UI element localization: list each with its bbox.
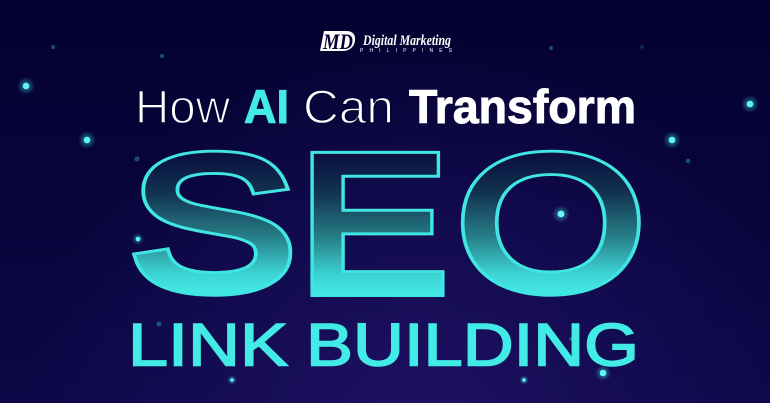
logo mark: MD <box>322 29 353 54</box>
title line <box>135 80 636 133</box>
word: AI: AI <box>244 80 289 133</box>
letter E: E <box>299 116 447 333</box>
word: Can: Can <box>303 80 394 133</box>
word: BUILDING: BUILDING <box>306 312 639 378</box>
letter E: E <box>299 116 447 333</box>
letter S: S <box>130 117 296 330</box>
letter O: O <box>457 117 645 330</box>
word: Transform: Transform <box>409 80 636 133</box>
letter O: O <box>457 117 645 330</box>
bright glowing dots <box>17 77 759 385</box>
logo subtitle: PHILIPPINES <box>360 48 453 54</box>
big SEO heading <box>130 116 645 333</box>
letter S: S <box>130 117 296 330</box>
dim dots <box>51 45 690 341</box>
logo <box>320 29 453 54</box>
word: LINK: LINK <box>128 312 288 378</box>
logo wordmark: Digital Marketing <box>362 33 451 49</box>
subtitle LINK BUILDING <box>128 312 639 378</box>
dot over SEO <box>552 205 570 223</box>
word: How: How <box>135 80 231 133</box>
